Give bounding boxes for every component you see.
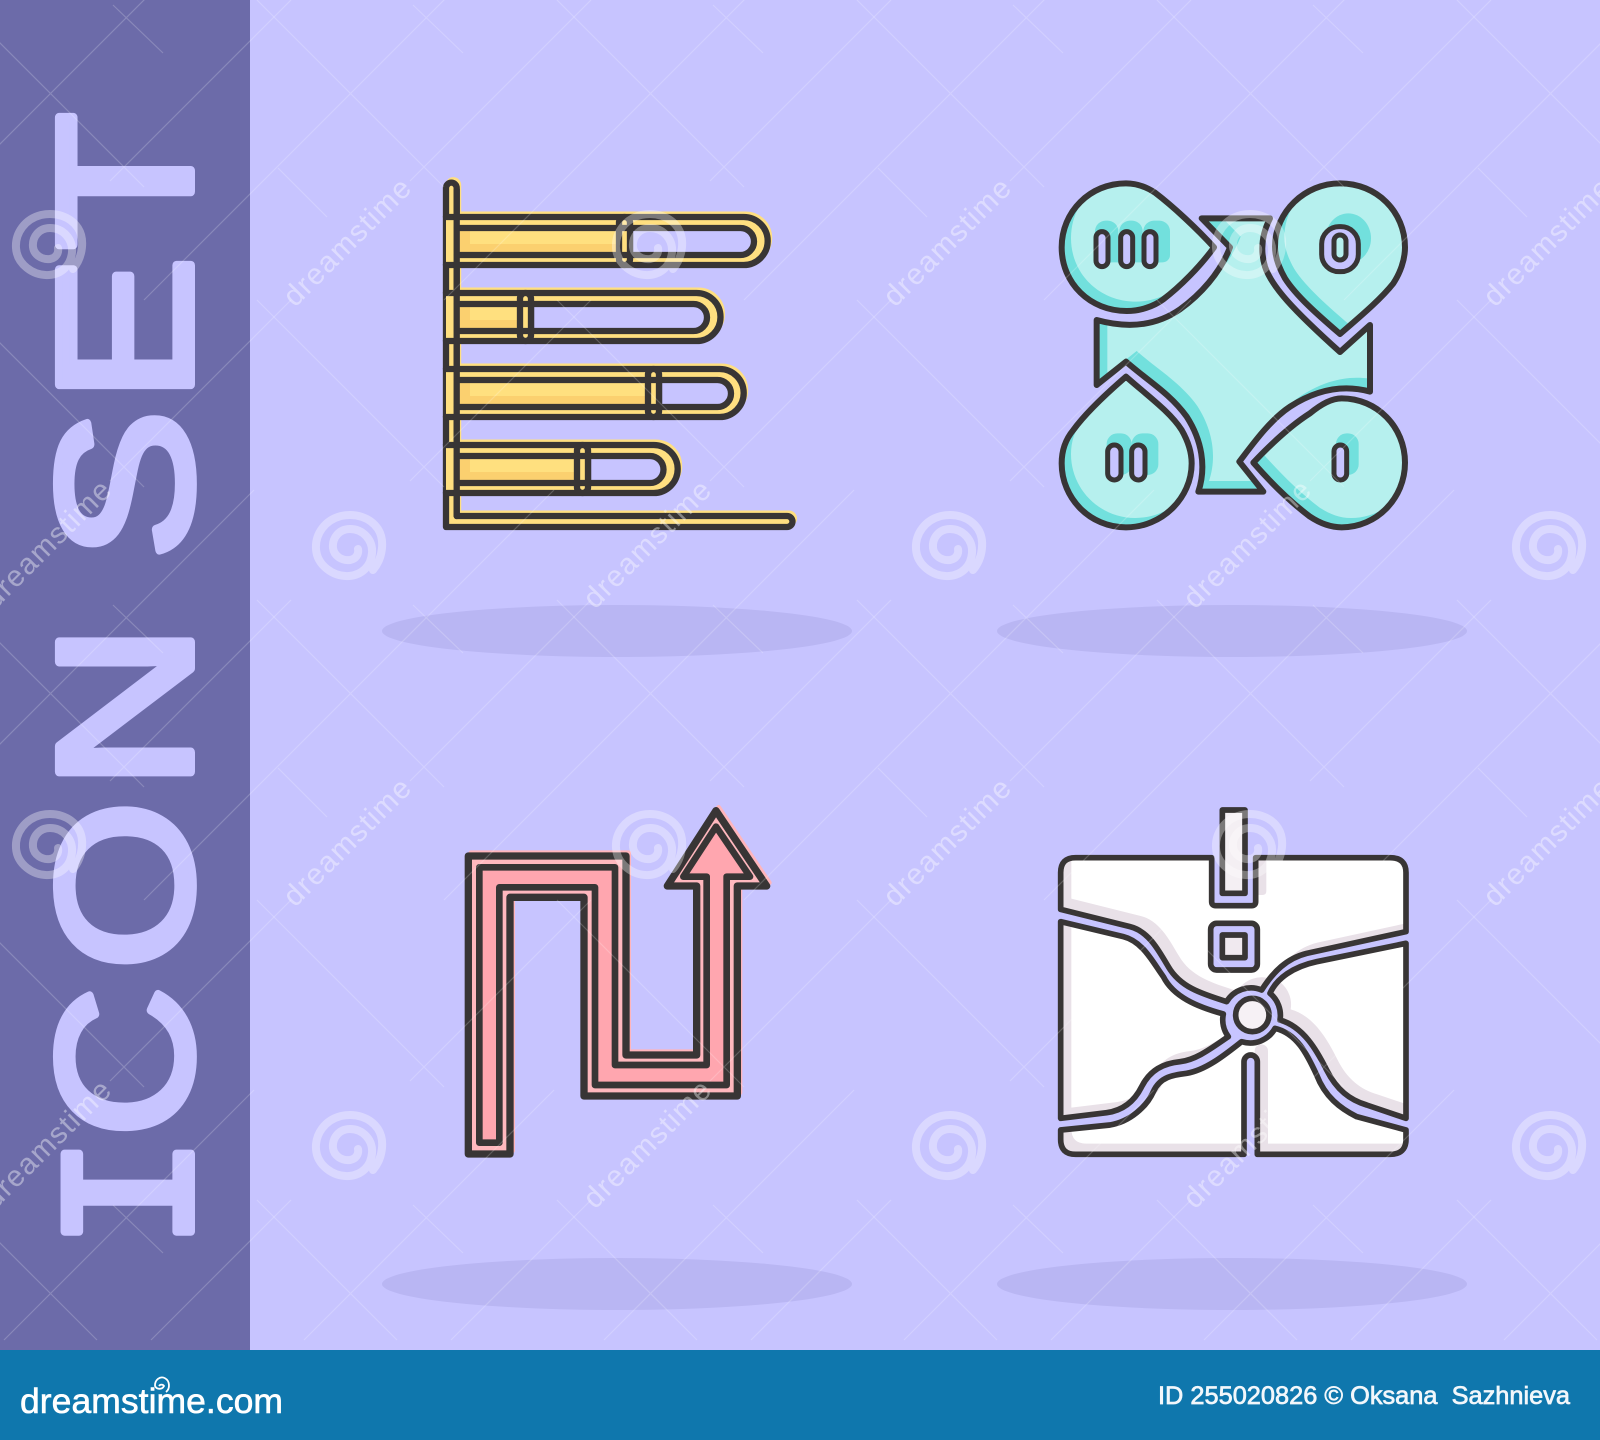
shadow: top left icon: [382, 605, 852, 657]
panel: sidebar: [0, 0, 250, 1350]
sidebar title: ICON SET: E: [17, 256, 232, 403]
icon: winding road arrow: [468, 807, 769, 1154]
sidebar title: ICON SET: I: [31, 1134, 249, 1251]
teardrop: zero ring: [1275, 174, 1414, 334]
sidebar title: ICON SET: O: [17, 800, 232, 970]
teardrop: two bars: [1062, 367, 1201, 527]
footer bar: [0, 1350, 1600, 1440]
shadow: top right icon: [997, 605, 1467, 657]
icon: horizontal bar chart: [446, 180, 794, 527]
teardrop: one bar: [1253, 389, 1414, 527]
icon: four-step infographic with teardrops: [1062, 174, 1414, 527]
watermark: dreamstime text: dreamstime: [577, 473, 719, 615]
watermark: spirals: [16, 214, 1582, 1176]
bar 3: [446, 369, 744, 417]
center shape: [1097, 208, 1381, 492]
sidebar title: ICON SET: [17, 112, 249, 1251]
teardrop: three bars: [1062, 174, 1223, 311]
sidebar title: ICON SET: C: [17, 986, 232, 1137]
watermark: dreamstime text: dreamstime: [277, 171, 419, 313]
watermark: dreamstime text: dreamstime: [877, 771, 1019, 913]
watermark: dreamstime text: dreamstime: [577, 1073, 719, 1215]
axis inner line: [454, 190, 460, 516]
watermark: dreamstime text: dreamstime: [277, 771, 419, 913]
sidebar title: ICON SET: T: [18, 112, 232, 250]
shadow: bottom right icon: [997, 1258, 1467, 1310]
footer credit: ID 255020826 © Oksana Sazhnieva: [1158, 1382, 1570, 1410]
watermark: dreamstime text: dreamstime: [877, 171, 1019, 313]
sidebar title: ICON SET: S: [18, 410, 232, 560]
shadow: bottom left icon: [382, 1258, 852, 1310]
bar 1: [446, 217, 768, 265]
sidebar title: ICON SET: N: [18, 623, 233, 791]
bar 4: [446, 445, 678, 493]
watermark: dreamstime text: dreamstime: [1177, 1073, 1319, 1215]
footer logo: dreamstime.com: dreamstime.com: [20, 1381, 283, 1421]
icon: map with roads and exclamation mark: [1061, 810, 1417, 1154]
watermark: dreamstime text: dreamstime: [1177, 473, 1319, 615]
bar 2: [446, 293, 720, 341]
watermark: dreamstime text: [0, 171, 1600, 1215]
